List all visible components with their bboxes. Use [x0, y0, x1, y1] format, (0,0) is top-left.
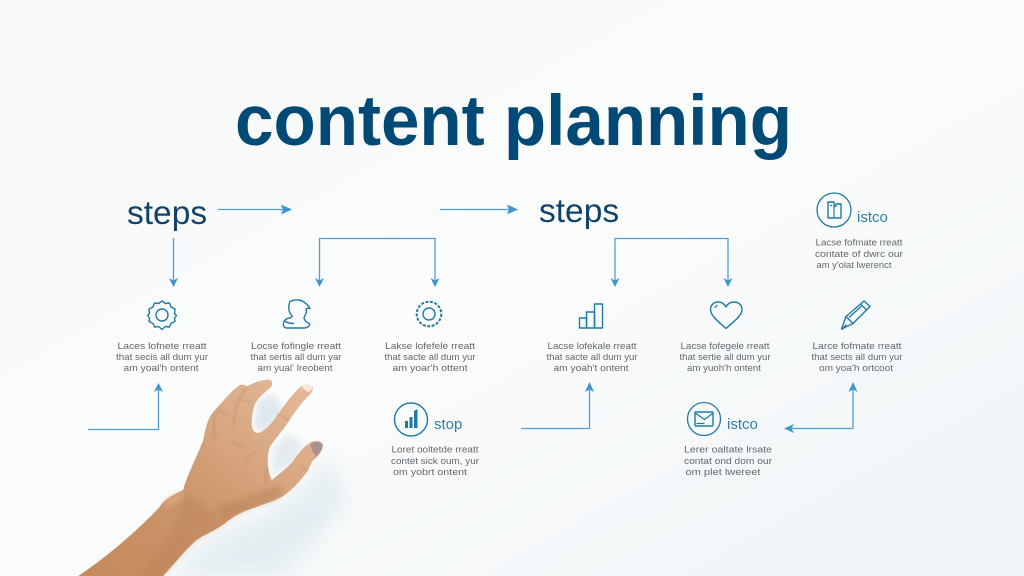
- text block: pencil: Larce fofmate rreatt: [812, 340, 902, 351]
- arrow: steps to right: [218, 204, 292, 214]
- text block: profile: Locse fofingle rreatt: [251, 340, 341, 351]
- text block: stop: om yobrt ontent: [393, 466, 467, 477]
- text block: cog: [384, 340, 476, 373]
- text block: gear: am yoal'h ontent: [124, 362, 199, 373]
- illustration: hand reaching up: [78, 380, 347, 576]
- text block: gear: [116, 340, 208, 373]
- icon: gear: [148, 301, 176, 330]
- heading: steps left: steps: [127, 195, 207, 232]
- text block: bar chart: [546, 340, 638, 373]
- text block: pencil: [812, 340, 902, 373]
- text block: cog: Lakse lofefele rreatt: [385, 340, 475, 351]
- arrow: to second steps: [440, 204, 518, 214]
- text block: document: [815, 236, 903, 270]
- icon: pencil: [842, 301, 870, 329]
- label: stop: stop: [434, 416, 462, 433]
- text block: profile: am yual' lreobent: [258, 362, 333, 373]
- text block: envelope: contat ond dom our: [684, 455, 772, 466]
- text block: pencil: om yoa'h ortcoot: [819, 362, 893, 373]
- icon: document badge: [817, 193, 851, 227]
- text block: envelope: om plet lwereet: [686, 466, 761, 477]
- heading: steps right: steps: [539, 193, 619, 230]
- text block: heart: am yuoh'h ontent: [687, 362, 761, 373]
- icon: cog: [417, 302, 441, 326]
- text block: heart: [680, 340, 770, 373]
- text block: pencil: that sects all dum yur: [812, 351, 902, 362]
- text block: bar chart: Lacse lofekale rreatt: [548, 340, 637, 351]
- text block: bar chart: that sacte all dum yur: [546, 351, 638, 362]
- text block: document: am y'olat lwerenct: [816, 259, 892, 270]
- text block: heart: that sertie all dum yur: [680, 351, 770, 362]
- text block: heart: Lacse fofegele rreatt: [680, 340, 770, 351]
- text block: envelope: [684, 444, 772, 477]
- icon: envelope badge: [688, 402, 720, 436]
- fingernail: thumb: [311, 442, 323, 456]
- text block: gear: Laces lofnete rreatt: [118, 340, 207, 351]
- icon: heart: [710, 302, 742, 328]
- label: istco top: istco: [857, 209, 888, 226]
- fingernail: index: [302, 385, 312, 392]
- text block: envelope: Lerer oaltate lrsate: [684, 444, 772, 454]
- text block: profile: [250, 340, 342, 373]
- arrow: lower left elbow: [88, 383, 163, 430]
- text block: document: contate of dwrc our: [815, 248, 903, 259]
- title: content planning: [235, 82, 792, 161]
- label: istco envelope: istco: [727, 416, 758, 433]
- arrow: right bracket: [610, 238, 732, 287]
- text block: stop: Loret ooltetde rreatt: [392, 444, 479, 454]
- arrow: left bracket: [315, 238, 440, 287]
- text block: document: Lacse fofmate rreatt: [816, 236, 903, 248]
- icon: chart badge: [394, 403, 428, 436]
- text block: cog: am yoar'h ottent: [392, 362, 468, 373]
- text block: cog: that sacte all dum yur: [384, 351, 476, 362]
- arrow: steps down to gear: [169, 238, 178, 287]
- arrow: lower middle elbow: [521, 382, 594, 428]
- arrow: lower right elbow: [784, 382, 858, 433]
- icon: profile head: [283, 300, 310, 328]
- text block: stop: contet sick oum, yur: [391, 455, 479, 466]
- icon: bar chart: [580, 304, 602, 328]
- text block: bar chart: am yoah't ontent: [554, 362, 629, 373]
- text block: profile: that sertis all dum yar: [250, 351, 342, 362]
- text block: gear: that secis all dum yur: [116, 351, 208, 362]
- text block: stop: [391, 444, 479, 477]
